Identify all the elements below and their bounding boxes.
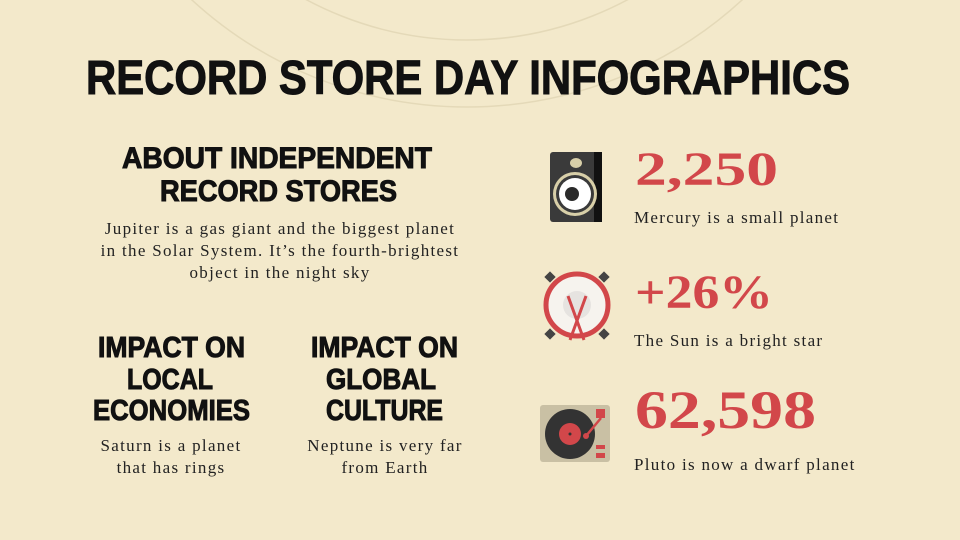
text: about body bbox=[101, 219, 459, 282]
stat 1 label: Mercury is a small planet bbox=[634, 208, 839, 227]
icon: drum bbox=[544, 271, 610, 340]
text: about body: Jupiter is a gas giant and the biggest planet bbox=[105, 219, 455, 238]
stat 2 number: +26% bbox=[635, 266, 773, 319]
heading: about: RECORD STORES bbox=[160, 175, 397, 208]
heading: about bbox=[122, 142, 432, 208]
heading: global culture bbox=[311, 332, 458, 427]
heading: global culture: IMPACT ON bbox=[311, 332, 458, 364]
heading: local economies bbox=[93, 332, 250, 427]
stat 1 number: 2,250 bbox=[635, 143, 778, 196]
icon: speaker bbox=[550, 152, 602, 222]
title: RECORD STORE DAY INFOGRAPHICS bbox=[86, 52, 850, 105]
heading: local economies: LOCAL bbox=[127, 364, 213, 396]
text: global body: Neptune is very far bbox=[307, 436, 463, 455]
text: about body: in the Solar System. It’s the fourth-brightest bbox=[101, 241, 459, 260]
heading: about: ABOUT INDEPENDENT bbox=[122, 142, 432, 175]
text: local body: Saturn is a planet bbox=[101, 436, 241, 455]
stat 2 label: The Sun is a bright star bbox=[634, 331, 823, 350]
text: local body bbox=[101, 436, 241, 477]
stat 3 label: Pluto is now a dwarf planet bbox=[634, 455, 856, 474]
text: global body: from Earth bbox=[341, 458, 429, 477]
heading: global culture: CULTURE bbox=[326, 395, 443, 427]
text: global body bbox=[307, 436, 463, 477]
stat 3 number: 62,598 bbox=[635, 380, 816, 440]
heading: local economies: ECONOMIES bbox=[93, 395, 250, 427]
text: about body: object in the night sky bbox=[190, 263, 370, 282]
icon: turntable bbox=[540, 405, 610, 462]
text: local body: that has rings bbox=[117, 458, 225, 477]
heading: global culture: GLOBAL bbox=[326, 364, 436, 396]
heading: local economies: IMPACT ON bbox=[98, 332, 245, 364]
